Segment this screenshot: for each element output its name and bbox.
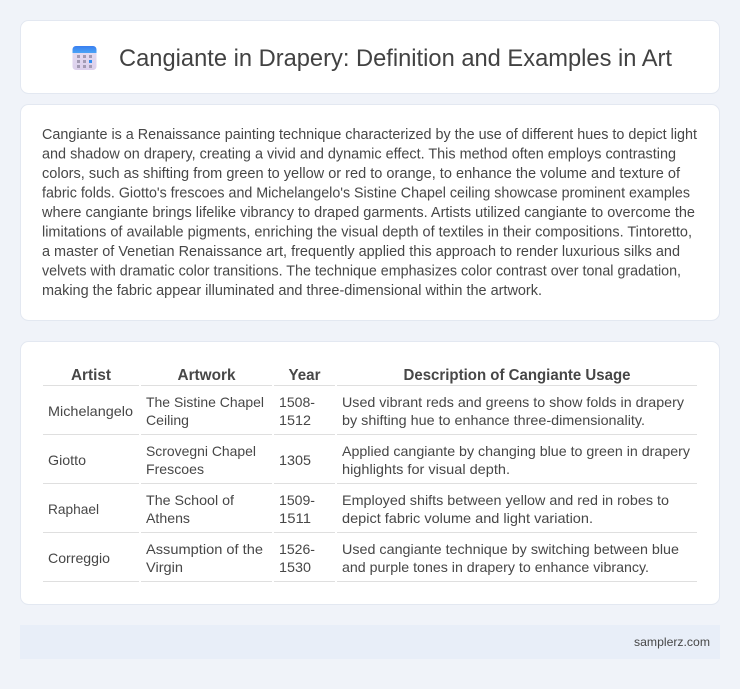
footer text: samplerz.com: [634, 635, 710, 649]
table row: Raphael: 1509-: [279, 492, 315, 508]
text block: description paragraph: limitations of available pigments, enriching the visual depth of textiles in their compositions. Tintoretto,: [42, 224, 692, 240]
table row: Michelangelo: 1508-: [279, 394, 315, 410]
table row: Correggio: 1530: [279, 559, 311, 575]
table header: Artist: [71, 367, 112, 384]
icon: calendar: [72, 46, 96, 70]
table row: Raphael: Employed shifts between yellow and red in robes to: [342, 492, 669, 508]
table row: Correggio: and purple tones in drapery to enhance vibrancy.: [342, 559, 649, 575]
table row: Giotto: Giotto: [48, 452, 86, 468]
table row: Correggio: Used cangiante technique by switching between blue: [342, 541, 679, 557]
table row: Michelangelo: Used vibrant reds and greens to show folds in drapery: [342, 394, 684, 410]
text block: description paragraph: colors, such as shifting from green to yellow or red to orange, to enhance the volume and texture of: [42, 166, 681, 182]
text block: description paragraph: fabric folds. Giotto's frescoes and Michelangelo's Sistine Chapel ceiling showcase prominent examples: [42, 186, 690, 202]
text block: description paragraph: where cangiante brings lifelike vibrancy to draped garments. Artists utilized cangiante to overcome the: [41, 205, 695, 221]
table row: Raphael: Athens: [146, 510, 190, 526]
table header: Description of Cangiante Usage: [404, 367, 631, 384]
panel: description: [20, 104, 720, 320]
table row: Raphael: depict fabric volume and light variation.: [342, 510, 593, 526]
text block: description paragraph: making the fabric appear illuminated and three-dimensional within the artwork.: [42, 283, 542, 299]
panel: table card: [20, 342, 720, 604]
table header: Artwork: [178, 367, 236, 384]
table row: Michelangelo: by shifting hue to enhance three-dimensionality.: [342, 412, 645, 428]
table row: Giotto: highlights for visual depth.: [342, 461, 510, 477]
text block: description paragraph: and shadow on drapery, creating a vivid and dynamic effect. This method often employs contrasting: [42, 146, 676, 162]
text block: description paragraph: velvets with dramatic color transitions. The technique emphasizes color contrast over tonal gradation,: [42, 264, 681, 280]
table row: Giotto: Scrovegni Chapel: [146, 443, 256, 459]
table row: Michelangelo: Ceiling: [146, 412, 189, 428]
table row: Correggio: Virgin: [146, 559, 183, 575]
table row: Giotto: 1305: [279, 452, 311, 468]
table row: Raphael: 1511: [279, 510, 311, 526]
table row: Michelangelo: The Sistine Chapel: [146, 394, 264, 410]
table header: [71, 367, 631, 384]
table row: Michelangelo: 1512: [279, 412, 311, 428]
title: Cangiante in Drapery: Definition and Examples in Art: [119, 45, 672, 72]
table row: Correggio: [48, 541, 679, 575]
text block: description paragraph: [41, 127, 697, 299]
table rules: [43, 385, 697, 582]
text block: description paragraph: Cangiante is a Renaissance painting technique characterized by the use of different hues to depict light: [42, 127, 697, 143]
table row: Giotto: Applied cangiante by changing blue to green in drapery: [342, 443, 690, 459]
panel: title card: [20, 20, 720, 94]
footer bar: [20, 625, 720, 659]
table row: Michelangelo: Michelangelo: [48, 403, 133, 419]
table row: Giotto: [48, 443, 690, 477]
table row: Correggio: Assumption of the: [146, 541, 263, 557]
table row: Raphael: The School of: [146, 492, 234, 508]
table row: Michelangelo: [48, 394, 684, 428]
table header: Year: [288, 367, 320, 384]
table row: Raphael: Raphael: [48, 501, 99, 517]
table row: Correggio: 1526-: [279, 541, 315, 557]
text block: description paragraph: a master of Venetian Renaissance art, frequently applied this approach to render luxurious silks and: [42, 244, 680, 260]
table row: Giotto: Frescoes: [146, 461, 204, 477]
table row: Correggio: Correggio: [48, 550, 110, 566]
table row: Raphael: [48, 492, 669, 526]
